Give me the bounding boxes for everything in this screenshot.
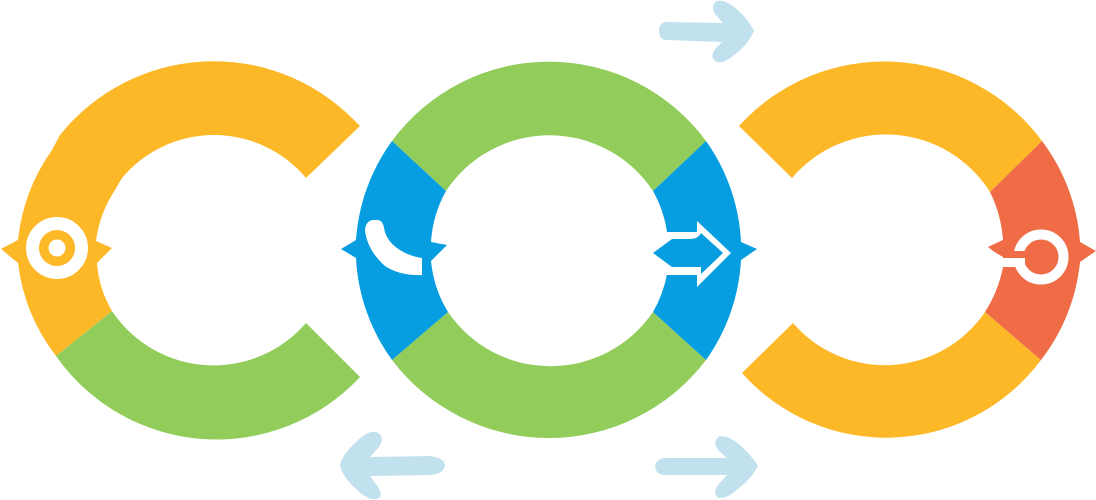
left ring orange segment — [1, 61, 360, 356]
right ring bottom orange segment — [742, 312, 1041, 438]
left ring green segment — [56, 311, 360, 439]
icon: outlined arrow — [653, 221, 731, 287]
icon: target — [32, 224, 82, 272]
middle ring — [341, 62, 757, 438]
left ring — [1, 61, 360, 439]
middle ring right blue segment — [653, 141, 757, 360]
icon: open circle with stem — [988, 234, 1064, 280]
middle ring left blue segment — [341, 141, 448, 360]
right ring red segment — [985, 141, 1096, 360]
arrow: bottom left-pointing — [340, 432, 445, 499]
arrow: top right-pointing — [659, 1, 754, 62]
middle ring top green segment — [392, 62, 706, 191]
right ring — [739, 61, 1096, 438]
icon: phone handset — [365, 220, 422, 275]
arrow: bottom right-pointing — [655, 436, 758, 498]
middle ring bottom green segment — [392, 312, 706, 438]
right ring top orange segment — [739, 61, 1042, 192]
